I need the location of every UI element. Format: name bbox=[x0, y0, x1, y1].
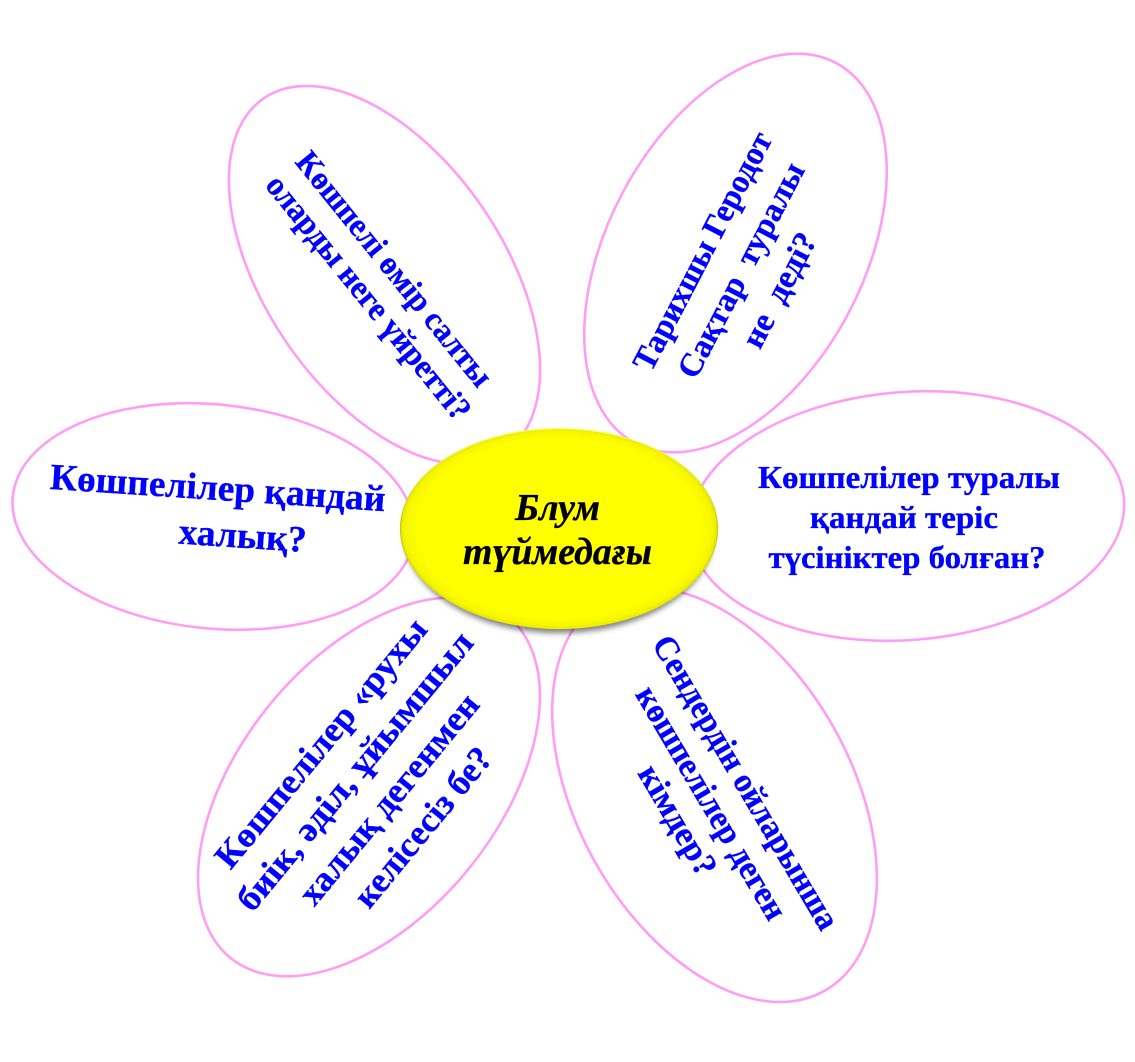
question: top right petal: не деді? bbox=[735, 227, 825, 354]
petal: bottom left bbox=[130, 535, 608, 1039]
question: bottom left petal: Көшпелілер «рухы bbox=[207, 610, 435, 876]
question: top right petal: Сақтар туралы bbox=[671, 157, 813, 384]
question: bottom left petal bbox=[195, 596, 549, 974]
centre title: түймедағы bbox=[463, 531, 652, 573]
question: right petal bbox=[758, 459, 1060, 575]
flower centre bbox=[400, 428, 718, 633]
question: left petal bbox=[46, 457, 387, 566]
question: bottom right petal: көшпелілер деген bbox=[628, 679, 794, 927]
question: bottom right petal bbox=[577, 629, 846, 976]
question: left petal: халық? bbox=[177, 512, 308, 561]
question: bottom left petal: келісесіз бе? bbox=[345, 739, 500, 915]
centre title bbox=[463, 487, 652, 573]
question: top left petal: оларды неге үйретті? bbox=[258, 168, 478, 428]
question: right petal: қандай теріс bbox=[810, 499, 998, 535]
question: bottom right petal: Сендердін ойларынша bbox=[644, 629, 846, 936]
petal: right bbox=[681, 376, 1133, 656]
centre title: Блум bbox=[514, 487, 600, 529]
question: right petal: түсініктер болған? bbox=[768, 539, 1046, 575]
question: top right petal bbox=[626, 126, 856, 417]
question: right petal: Көшпелілер туралы bbox=[758, 459, 1060, 495]
question: left petal: Көшпелілер қандай bbox=[49, 457, 387, 520]
question: bottom left petal: халық дегенмен bbox=[290, 686, 487, 913]
question: top right petal: Тарихшы Геродот bbox=[626, 126, 780, 377]
petal: top left bbox=[166, 31, 603, 519]
question: top left petal: Көшпелі өмір салты bbox=[288, 145, 500, 394]
question: bottom left petal: биік, әділ, ұйымшыл bbox=[229, 624, 481, 918]
petal: left bbox=[2, 385, 425, 648]
petal: bottom right bbox=[485, 532, 944, 1058]
petal: top right bbox=[522, 3, 949, 503]
question: bottom right petal: кімдер? bbox=[630, 758, 724, 883]
